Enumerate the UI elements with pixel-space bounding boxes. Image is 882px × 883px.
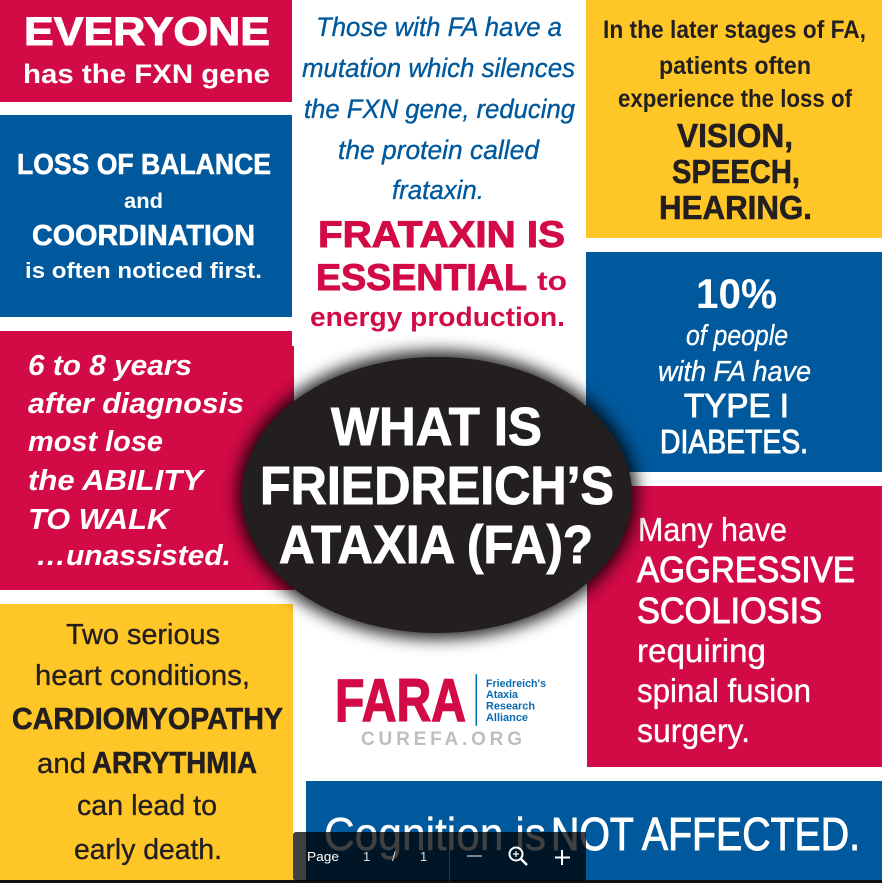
panel: ability to walk: after diagnosis	[28, 388, 244, 420]
text block: frataxin explanation: mutation which silences	[302, 53, 575, 83]
panel: type 1 diabetes: of people	[686, 320, 788, 352]
panel: aggressive scoliosis: Many have	[638, 511, 787, 548]
panel: loss of balance	[0, 115, 292, 317]
panel: aggressive scoliosis	[587, 486, 882, 767]
panel: heart conditions: heart conditions,	[35, 660, 250, 692]
icon: zoom in	[555, 850, 570, 865]
toolbar: pdf viewer controls: 1	[363, 849, 370, 864]
panel: heart conditions: Two serious	[66, 619, 220, 651]
panel: heart conditions: ARRYTHMIA	[92, 745, 257, 780]
panel: type 1 diabetes: 10%	[696, 270, 777, 317]
title oval: what is Friedreich's ataxia	[237, 351, 637, 639]
panel: aggressive scoliosis: SCOLIOSIS	[637, 590, 822, 631]
text block: frataxin explanation: the protein called	[338, 135, 540, 165]
panel: type 1 diabetes: TYPE I	[684, 387, 789, 424]
logo: FARA: Friedreich's	[486, 678, 546, 690]
panel: type 1 diabetes: DIABETES.	[660, 423, 808, 460]
panel: ability to walk: TO WALK	[28, 504, 171, 536]
logo: FARA: CUREFA.ORG	[361, 729, 522, 750]
panel: type 1 diabetes	[586, 252, 882, 472]
logo: FARA: FARA	[335, 667, 466, 734]
panel: ability to walk: most lose	[28, 426, 163, 458]
panel: heart conditions: and	[37, 748, 86, 780]
panel: heart conditions: CARDIOMYOPATHY	[12, 701, 283, 736]
panel: aggressive scoliosis: AGGRESSIVE	[637, 549, 855, 590]
icon: magnifier	[510, 848, 527, 865]
panel: ability to walk: 6 to 8 years	[28, 350, 192, 382]
panel: later stages: experience the loss of	[618, 85, 853, 113]
text block: frataxin explanation	[302, 12, 575, 205]
title oval: what is Friedreich's ataxia: WHAT IS	[331, 397, 542, 457]
panel: aggressive scoliosis: requiring	[637, 632, 766, 669]
bottom edge	[0, 880, 882, 883]
panel: later stages: SPEECH,	[672, 153, 800, 190]
logo: FARA: Research	[486, 700, 535, 712]
panel: later stages: VISION,	[677, 117, 793, 154]
panel: heart conditions	[0, 604, 293, 880]
panel: aggressive scoliosis: surgery.	[637, 712, 750, 749]
panel: everyone has the FXN gene: EVERYONE	[24, 10, 270, 54]
logo: FARA: Ataxia	[486, 689, 519, 701]
panel: ability to walk: the ABILITY	[28, 465, 206, 497]
panel: later stages: HEARING.	[659, 189, 812, 226]
toolbar: pdf viewer controls	[293, 832, 586, 881]
panel: loss of balance: COORDINATION	[32, 220, 255, 252]
toolbar: pdf viewer controls: 1	[420, 849, 427, 864]
panel: later stages: patients often	[659, 52, 811, 80]
callout: frataxin is essential: ESSENTIAL	[316, 257, 527, 298]
panel: loss of balance: and	[124, 190, 163, 213]
panel: loss of balance: is often noticed first.	[25, 258, 262, 283]
callout: frataxin is essential: to	[537, 266, 567, 296]
text block: frataxin explanation: frataxin.	[392, 175, 484, 205]
panel: cognition not affected: Cognition is	[324, 808, 546, 860]
title oval: what is Friedreich's ataxia: FRIEDREICH’S	[260, 456, 614, 516]
toolbar: pdf viewer controls: /	[392, 849, 396, 864]
callout: frataxin is essential: energy production.	[310, 302, 565, 332]
logo: FARA	[335, 667, 546, 750]
callout: frataxin is essential: FRATAXIN IS	[318, 214, 565, 255]
callout: frataxin is essential	[310, 214, 567, 332]
panel: ability to walk	[0, 331, 294, 590]
panel: everyone has the FXN gene	[0, 0, 292, 102]
panel: heart conditions: can lead to	[77, 790, 217, 822]
panel: type 1 diabetes: with FA have	[658, 356, 811, 388]
text block: frataxin explanation: the FXN gene, reducing	[304, 94, 575, 124]
panel: cognition not affected	[306, 781, 882, 880]
panel: aggressive scoliosis: spinal fusion	[637, 672, 811, 709]
panel: loss of balance: LOSS OF BALANCE	[17, 149, 271, 181]
panel: later stages	[586, 0, 882, 238]
logo: FARA: Alliance	[486, 712, 528, 724]
toolbar: pdf viewer controls: Page	[307, 849, 339, 864]
panel: ability to walk: …unassisted.	[36, 540, 231, 572]
title oval: what is Friedreich's ataxia: ATAXIA (FA)?	[279, 515, 593, 575]
panel: everyone has the FXN gene: has the FXN gene	[23, 59, 270, 89]
panel: heart conditions: early death.	[74, 834, 222, 866]
icon: zoom out	[467, 855, 482, 857]
text block: frataxin explanation: Those with FA have a	[316, 12, 562, 42]
